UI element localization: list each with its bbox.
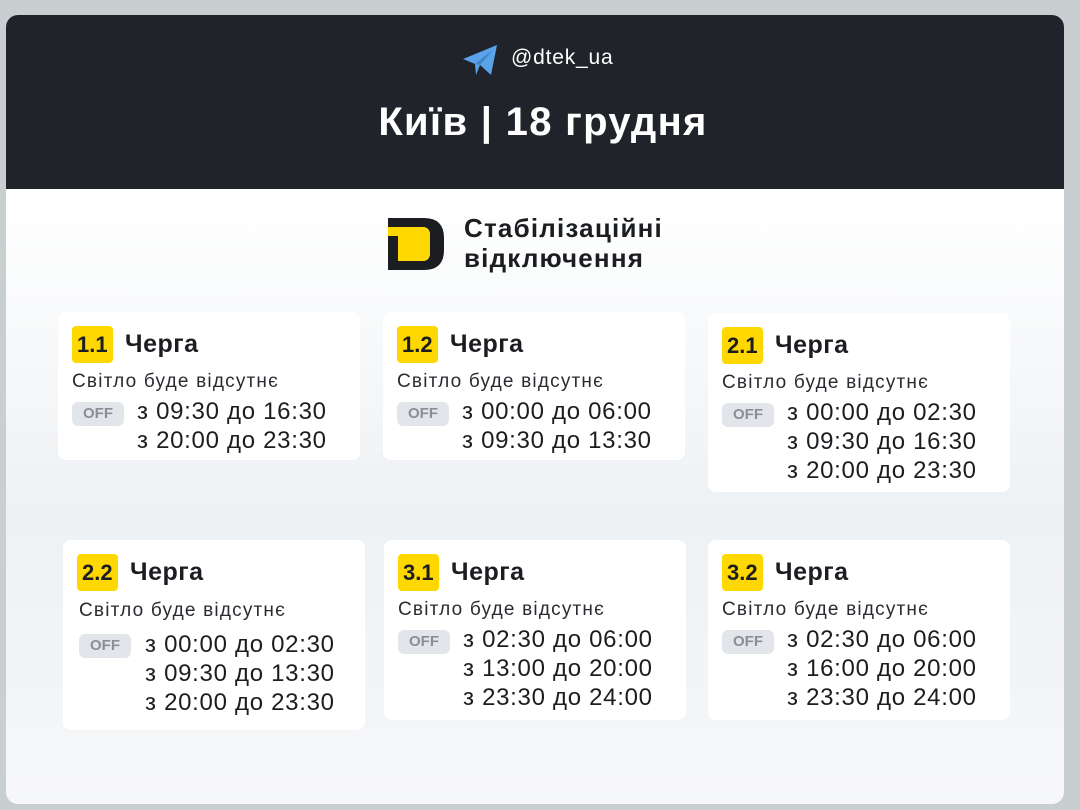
label: Черга xyxy=(775,558,849,586)
badge 3.1 xyxy=(398,554,439,591)
times: з 20:00 до 23:30 xyxy=(137,427,327,454)
times: з 20:00 до 23:30 xyxy=(787,457,977,484)
label: Черга xyxy=(125,330,199,358)
card 1.1 xyxy=(58,312,360,460)
badge 3.1: 3.1 xyxy=(403,560,434,585)
badge 2.1 xyxy=(722,327,763,364)
card 1.2 xyxy=(383,312,685,460)
handle: @dtek_ua xyxy=(511,46,613,69)
times: з 00:00 до 02:30 xyxy=(145,631,335,658)
off pill: OFF xyxy=(409,633,439,650)
times xyxy=(787,399,977,484)
times: з 23:30 до 24:00 xyxy=(787,684,977,711)
off pill xyxy=(397,402,449,426)
logo xyxy=(388,218,444,270)
off pill xyxy=(79,634,131,658)
off pill xyxy=(72,402,124,426)
header xyxy=(6,15,1064,189)
times xyxy=(463,626,653,711)
off pill xyxy=(722,630,774,654)
card 3.1 xyxy=(384,540,686,720)
label: Черга xyxy=(451,558,525,586)
subtitle heading xyxy=(464,213,663,273)
badge 1.1 xyxy=(72,326,113,363)
badge 1.1: 1.1 xyxy=(77,332,108,357)
icon: telegram xyxy=(463,45,497,75)
times: з 02:30 до 06:00 xyxy=(463,626,653,653)
times xyxy=(787,626,977,711)
sub: Світло буде відсутнє xyxy=(722,372,929,393)
times: з 20:00 до 23:30 xyxy=(145,689,335,716)
sub: Світло буде відсутнє xyxy=(722,599,929,620)
times: з 16:00 до 20:00 xyxy=(787,655,977,682)
off pill: OFF xyxy=(733,633,763,650)
badge 1.2 xyxy=(397,326,438,363)
off pill: OFF xyxy=(408,405,438,422)
subtitle heading: відключення xyxy=(464,243,644,273)
times xyxy=(462,398,652,454)
subtitle heading: Стабілізаційні xyxy=(464,213,663,243)
sub: Світло буде відсутнє xyxy=(72,371,279,392)
times: з 00:00 до 06:00 xyxy=(462,398,652,425)
badge 3.2: 3.2 xyxy=(727,560,758,585)
badge 2.1: 2.1 xyxy=(727,333,758,358)
label: Черга xyxy=(775,331,849,359)
badge 1.2: 1.2 xyxy=(402,332,433,357)
times: з 23:30 до 24:00 xyxy=(463,684,653,711)
badge 3.2 xyxy=(722,554,763,591)
times: з 09:30 до 16:30 xyxy=(137,398,327,425)
sub: Світло буде відсутнє xyxy=(397,371,604,392)
off pill: OFF xyxy=(90,637,120,654)
off pill xyxy=(722,403,774,427)
card 2.1 xyxy=(708,313,1010,492)
times xyxy=(137,398,327,454)
times: з 09:30 до 16:30 xyxy=(787,428,977,455)
off pill: OFF xyxy=(733,406,763,423)
off pill xyxy=(398,630,450,654)
badge 2.2: 2.2 xyxy=(82,560,113,585)
times: з 09:30 до 13:30 xyxy=(145,660,335,687)
sub: Світло буде відсутнє xyxy=(398,599,605,620)
times xyxy=(145,631,335,716)
off pill: OFF xyxy=(83,405,113,422)
times: з 09:30 до 13:30 xyxy=(462,427,652,454)
title: Київ | 18 грудня xyxy=(378,100,708,144)
sub: Світло буде відсутнє xyxy=(79,600,286,621)
badge 2.2 xyxy=(77,554,118,591)
times: з 00:00 до 02:30 xyxy=(787,399,977,426)
times: з 02:30 до 06:00 xyxy=(787,626,977,653)
times: з 13:00 до 20:00 xyxy=(463,655,653,682)
label: Черга xyxy=(450,330,524,358)
label: Черга xyxy=(130,558,204,586)
card 3.2 xyxy=(708,540,1010,720)
card 2.2 xyxy=(63,540,365,730)
